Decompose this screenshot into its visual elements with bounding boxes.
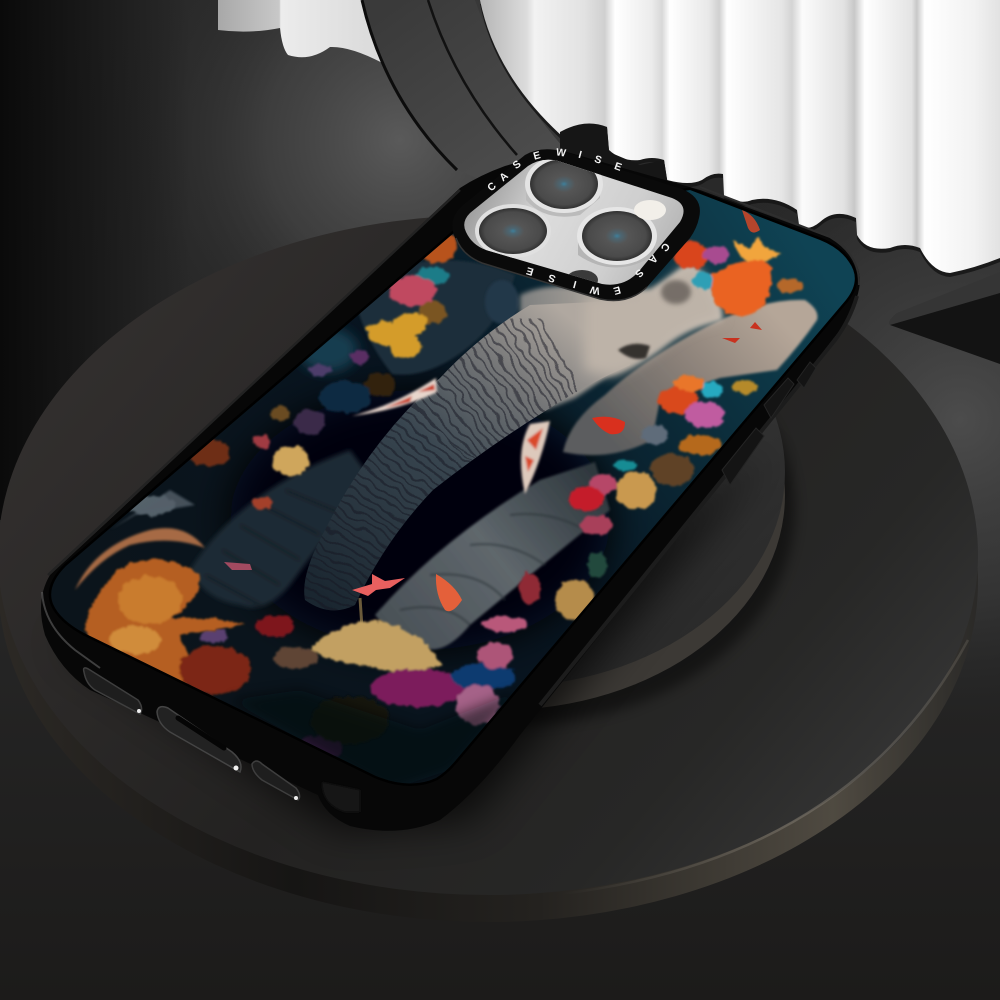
CASEWISE lettering: I — [572, 278, 578, 290]
elephant head — [520, 262, 722, 410]
CASEWISE lettering: E — [532, 149, 542, 163]
CASEWISE lettering: S — [593, 153, 603, 167]
disk rim — [0, 242, 978, 922]
flowers bottom — [201, 615, 516, 760]
right lens — [577, 207, 657, 268]
left ear — [356, 260, 515, 375]
CASEWISE lettering: S — [547, 271, 557, 285]
side buttons — [722, 362, 816, 485]
flowers on right ear — [614, 376, 758, 486]
decorative arches — [362, 0, 563, 182]
CASEWISE lettering — [485, 146, 672, 297]
right tusk — [521, 421, 550, 494]
elephant left leg — [190, 450, 372, 608]
bottom speaker right — [252, 761, 300, 800]
bottom lens — [568, 270, 598, 282]
CASEWISE lettering: I — [577, 149, 583, 161]
right side object — [889, 272, 1000, 364]
case artwork — [51, 190, 855, 784]
CASEWISE lettering: C — [658, 240, 672, 254]
left tusk — [352, 378, 437, 416]
camera island — [452, 146, 700, 300]
orange leaf — [75, 528, 205, 590]
elephant second leg — [375, 462, 610, 649]
trunk — [304, 302, 613, 610]
upper-left teal wash — [298, 328, 358, 372]
flowers lower centre — [483, 472, 656, 632]
CASEWISE lettering: E — [525, 264, 535, 278]
CASEWISE lettering: E — [613, 160, 623, 174]
CASEWISE lettering: W — [589, 283, 601, 297]
case left highlight — [42, 592, 100, 668]
charging port — [157, 707, 241, 772]
dark centre — [230, 390, 610, 650]
small disk shadow — [540, 449, 796, 721]
artwork base — [51, 190, 855, 784]
big orange flower — [85, 559, 251, 694]
CASEWISE lettering: A — [497, 170, 511, 184]
large disk — [0, 215, 978, 922]
small disk — [540, 417, 796, 721]
phone case — [41, 150, 860, 831]
CASEWISE lettering: S — [632, 266, 646, 280]
ear opening — [485, 280, 519, 324]
petals — [436, 574, 462, 611]
CASEWISE lettering: W — [555, 146, 567, 160]
CASEWISE lettering: S — [511, 158, 523, 172]
forehead shading — [661, 280, 691, 304]
CASEWISE lettering: A — [646, 252, 660, 266]
top lens — [525, 155, 603, 217]
phone shadow — [60, 450, 770, 830]
flowers top right — [673, 238, 803, 316]
flash — [634, 200, 666, 220]
right curtain — [480, 0, 1000, 273]
flowers mid left — [126, 406, 326, 515]
island frame — [452, 149, 700, 300]
island window — [464, 160, 684, 285]
dark scallop behind camera — [560, 123, 668, 185]
small disk rim — [542, 484, 785, 708]
grey leaves — [119, 489, 195, 524]
CASEWISE lettering: E — [612, 283, 622, 297]
elephant eye — [618, 344, 650, 359]
CASEWISE lettering: C — [485, 180, 499, 194]
left curtain — [218, 0, 388, 66]
bottom vignette — [270, 693, 502, 781]
left lens — [475, 204, 551, 258]
lenses — [475, 155, 666, 290]
bottom speaker left — [84, 668, 142, 714]
small disk top — [568, 417, 785, 680]
ear petals — [722, 322, 762, 343]
flowers upper left — [307, 234, 458, 415]
right ear — [563, 300, 818, 455]
head blend over trunk — [585, 262, 722, 375]
red fish — [592, 417, 625, 434]
case body — [41, 150, 860, 831]
screen border — [51, 190, 855, 784]
disk top surface — [0, 215, 978, 895]
curtain shadow — [480, 4, 1000, 277]
